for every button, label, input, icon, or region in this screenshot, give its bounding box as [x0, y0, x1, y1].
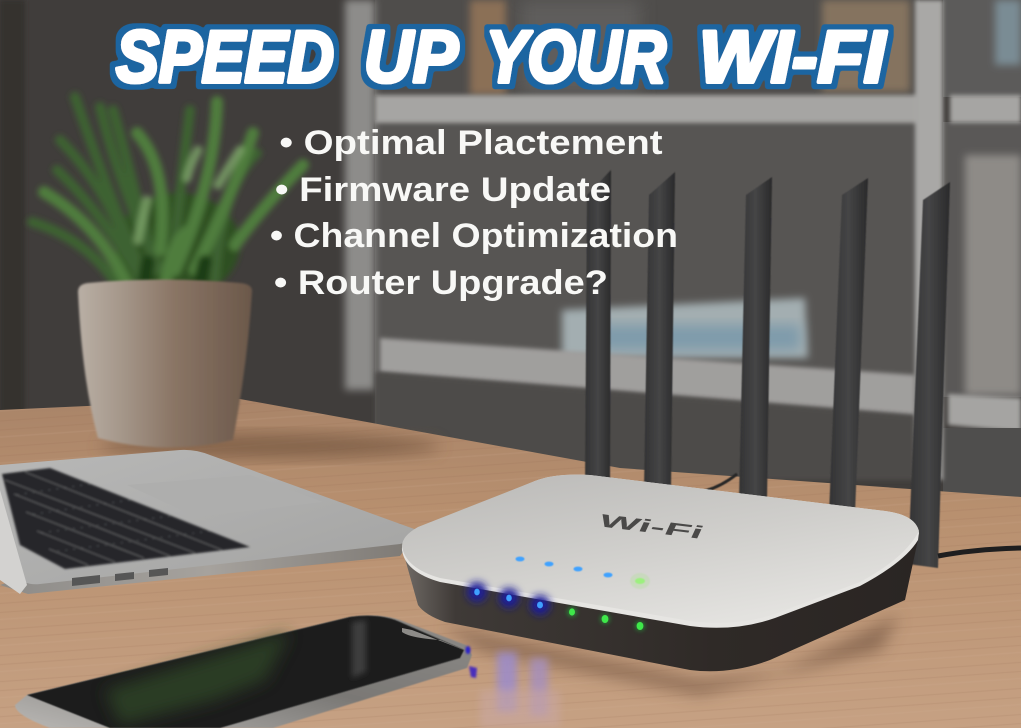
bullet: optimal placement: • Optimal Plactement [280, 124, 662, 162]
rear cable [705, 474, 737, 491]
router lid [402, 475, 919, 628]
router label: Wi-Fi [595, 511, 707, 543]
blurred room background [0, 0, 1021, 510]
wooden desk [0, 399, 1021, 728]
laptop screen hinge [0, 490, 27, 594]
title: SPEED [116, 17, 334, 98]
laptop [0, 450, 417, 594]
title [116, 17, 887, 98]
router front LEDs [467, 582, 645, 631]
title: YOUR [486, 17, 666, 98]
phone blue lights [466, 646, 477, 678]
phone plant reflection [105, 632, 290, 725]
desk shadow [100, 434, 440, 458]
laptop ports [72, 568, 168, 586]
bullet list [270, 124, 678, 302]
phone reflection glow [480, 652, 560, 728]
bullet: channel optimization: • Channel Optimization [270, 217, 678, 255]
antennas [585, 170, 950, 568]
bullet: firmware update: • Firmware Update [275, 171, 611, 209]
router [402, 475, 919, 671]
bullet: router upgrade: • Router Upgrade? [274, 264, 608, 302]
laptop trackpad [127, 475, 323, 517]
router shadow [440, 615, 900, 695]
title: WI-FI [699, 17, 887, 98]
title: UP [364, 17, 458, 98]
router top LEDs [516, 557, 650, 589]
router cable [938, 548, 1021, 556]
plant [32, 97, 303, 297]
plant pot [78, 280, 252, 448]
router base [404, 535, 919, 671]
smartphone [15, 616, 477, 728]
phone highlight [352, 620, 366, 678]
laptop keyboard [2, 468, 250, 569]
phone body [15, 616, 472, 728]
phone screen [27, 616, 464, 728]
